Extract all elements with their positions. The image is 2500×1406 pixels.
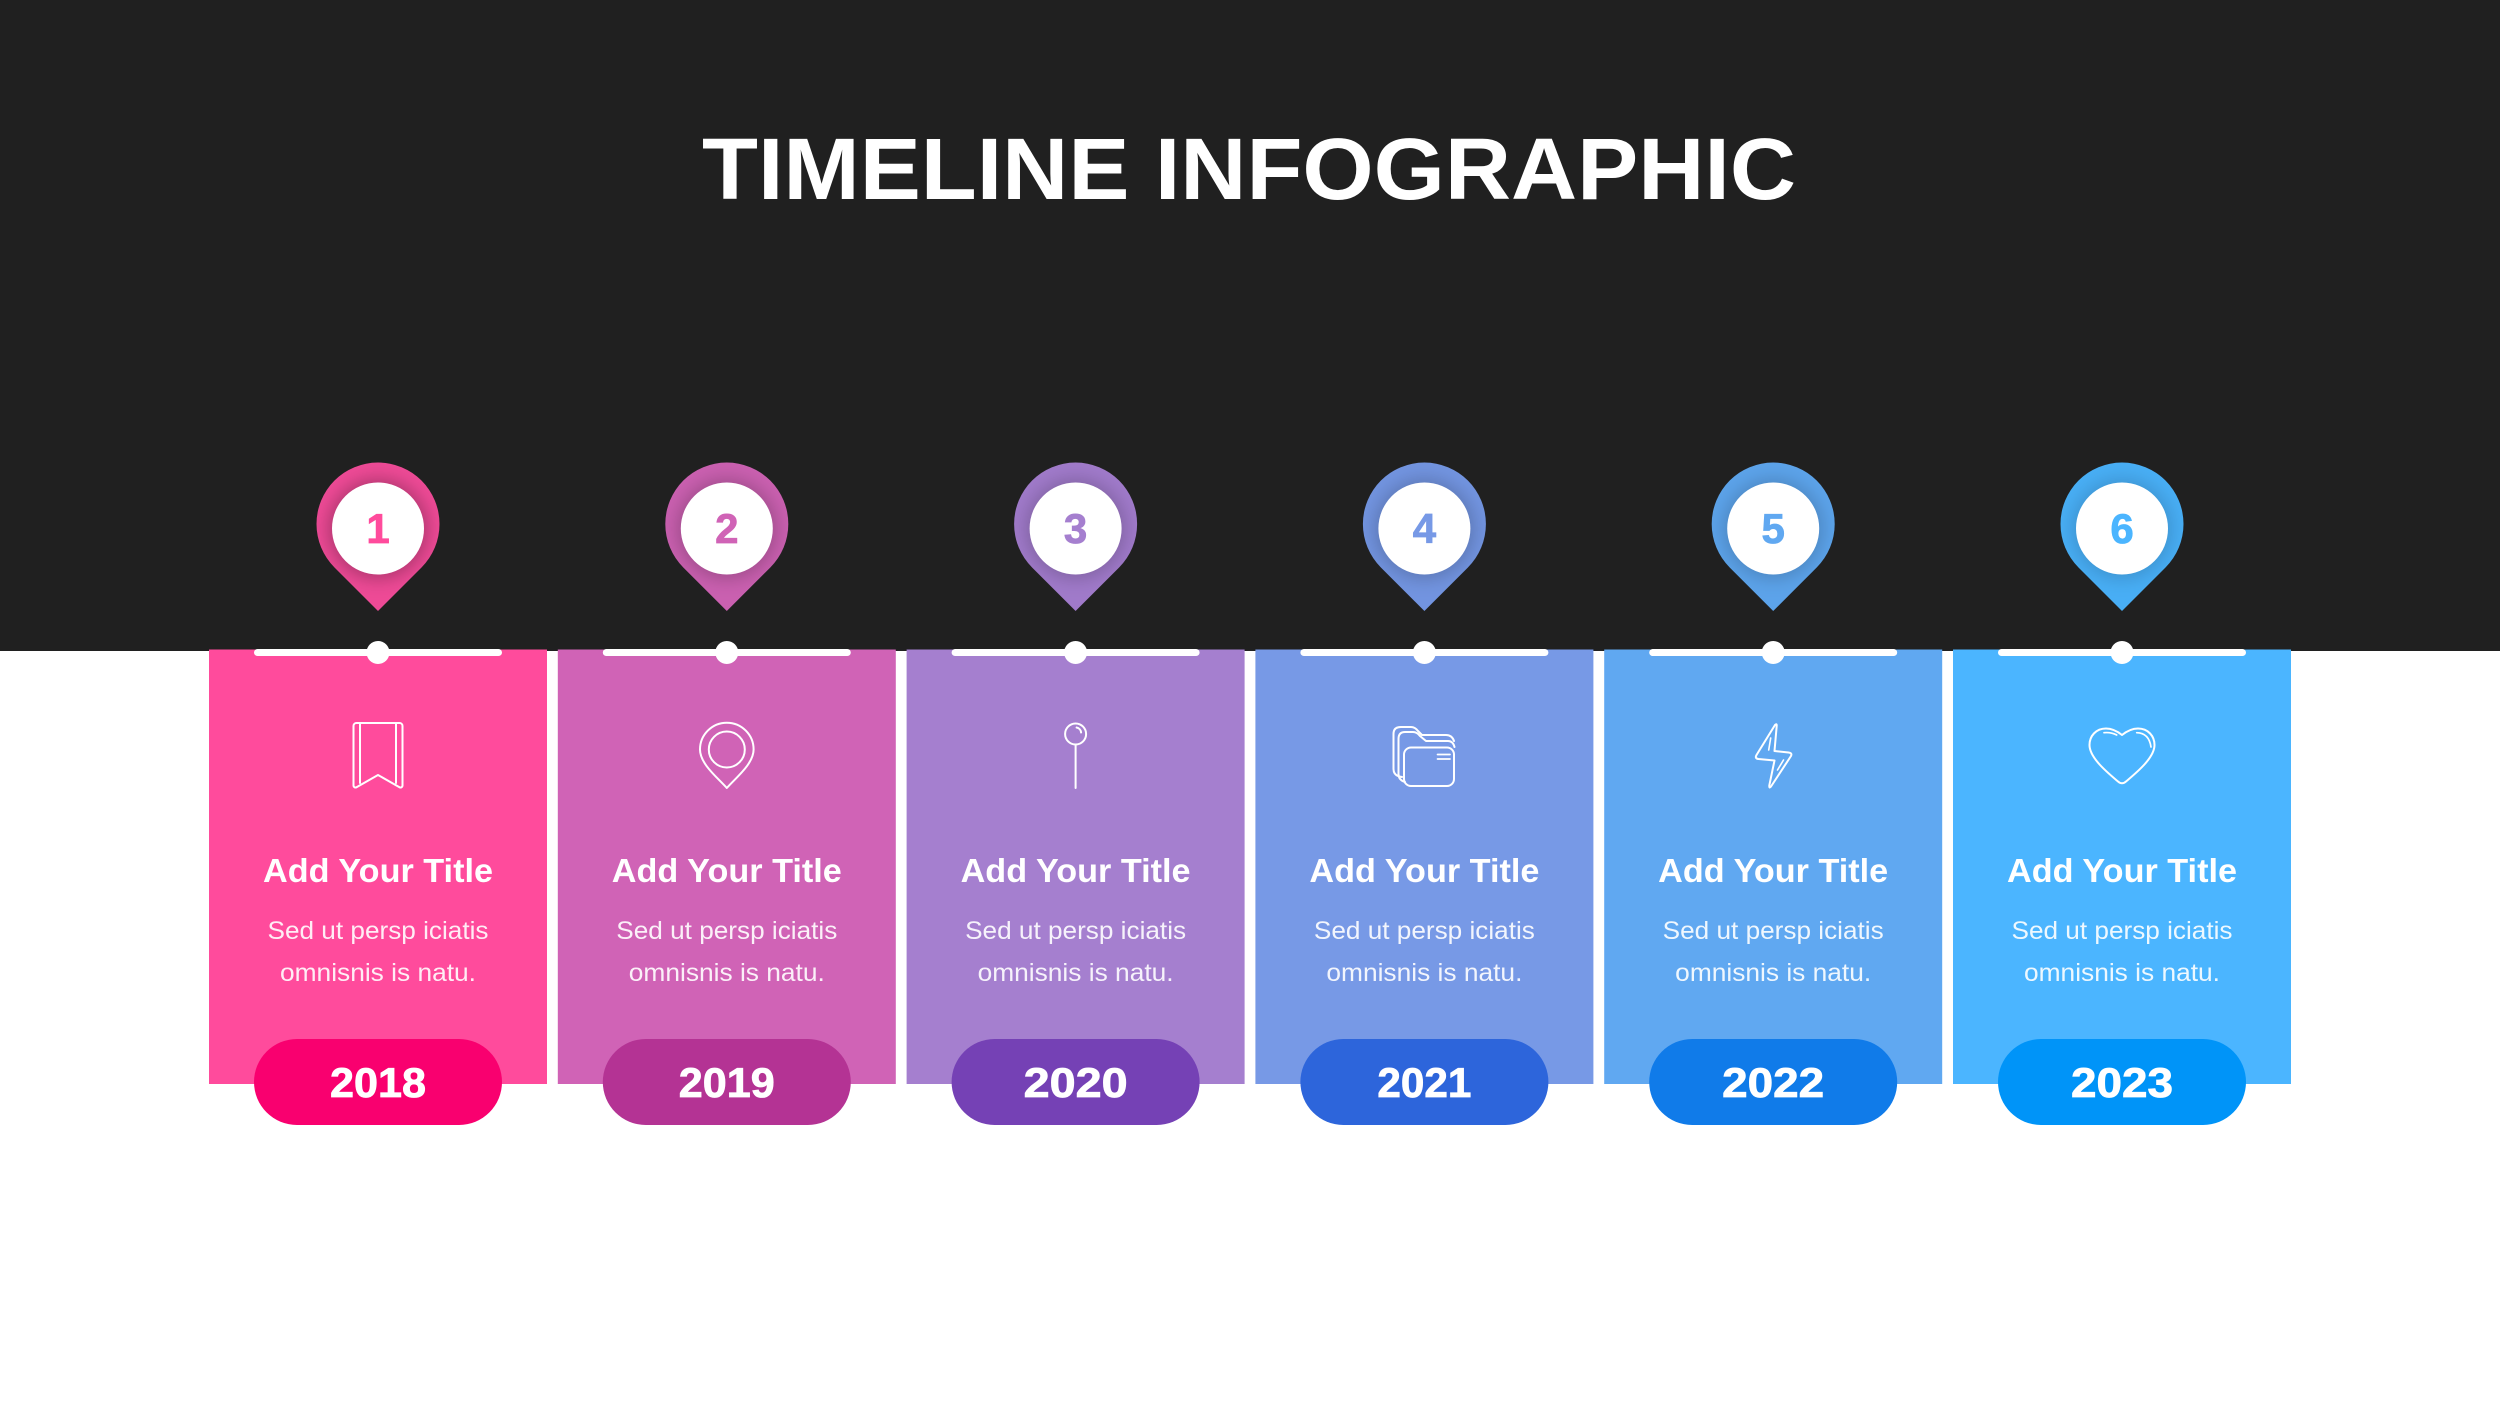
pin 6 xyxy=(2060,463,2184,611)
card 6 xyxy=(1953,650,2291,1084)
card text 6: Sed ut persp iciatis xyxy=(2012,917,2232,945)
column 3: 2020 xyxy=(907,463,1245,1125)
year pill 1 xyxy=(254,1039,502,1125)
card text 6 xyxy=(2012,917,2232,987)
icon: location pin xyxy=(700,723,754,788)
card 4 xyxy=(1255,650,1593,1084)
year pill 3 xyxy=(952,1039,1200,1125)
card 5 xyxy=(1604,650,1942,1084)
card text 1: omnisnis is natu. xyxy=(280,959,476,987)
slider 6 xyxy=(1998,641,2246,664)
title: TIMELINE INFOGRAPHIC xyxy=(702,121,1796,218)
pin 1 xyxy=(316,463,440,611)
card text 4 xyxy=(1314,917,1535,987)
card title 2: Add Your Title xyxy=(612,852,842,889)
icon: folders xyxy=(1394,727,1454,786)
card text 5 xyxy=(1663,917,1884,987)
card text 1: Sed ut persp iciatis xyxy=(268,917,488,945)
dark header background xyxy=(0,0,2500,651)
card text 3: Sed ut persp iciatis xyxy=(965,917,1186,945)
pin 2: 2 xyxy=(715,505,738,552)
card text 2 xyxy=(616,917,837,987)
card text 3: omnisnis is natu. xyxy=(978,959,1174,987)
card 1 xyxy=(209,650,547,1084)
year pill 5: 2022 xyxy=(1722,1059,1824,1106)
icon: lightning bolt xyxy=(1756,724,1791,788)
card text 5: Sed ut persp iciatis xyxy=(1663,917,1884,945)
card text 4: Sed ut persp iciatis xyxy=(1314,917,1535,945)
pin 5: 5 xyxy=(1762,505,1785,552)
pin 4 xyxy=(1363,463,1486,611)
year pill 6 xyxy=(1998,1039,2246,1125)
card text 5: omnisnis is natu. xyxy=(1675,959,1871,987)
icon: lollipop pin xyxy=(1065,724,1086,788)
column 2: 2019 xyxy=(558,463,896,1125)
icon: heart xyxy=(2090,728,2154,783)
year pill 4 xyxy=(1300,1039,1548,1125)
pin 3: 3 xyxy=(1064,505,1087,552)
slider 1 xyxy=(254,641,502,664)
card title 1: Add Your Title xyxy=(263,852,493,889)
slider 3 xyxy=(952,641,1200,664)
card text 4: omnisnis is natu. xyxy=(1326,959,1522,987)
card title 4: Add Your Title xyxy=(1309,852,1539,889)
year pill 2 xyxy=(603,1039,851,1125)
pin 3 xyxy=(1014,463,1137,611)
pin 2 xyxy=(665,463,788,611)
year pill 5 xyxy=(1649,1039,1897,1125)
card text 1 xyxy=(268,917,488,987)
card text 2: Sed ut persp iciatis xyxy=(616,917,837,945)
slider 2 xyxy=(603,641,851,664)
card title 6: Add Your Title xyxy=(2007,852,2237,889)
year pill 1: 2018 xyxy=(330,1059,426,1106)
card title 3: Add Your Title xyxy=(961,852,1191,889)
year pill 4: 2021 xyxy=(1377,1059,1471,1106)
pin 5 xyxy=(1712,463,1835,611)
card 3 xyxy=(907,650,1245,1084)
slider 5 xyxy=(1649,641,1897,664)
card 2 xyxy=(558,650,896,1084)
slider 4 xyxy=(1300,641,1548,664)
card title 5: Add Your Title xyxy=(1658,852,1888,889)
column 5: 2022 xyxy=(1604,463,1942,1125)
column 4: 2021 xyxy=(1255,463,1593,1125)
pin 4: 4 xyxy=(1413,505,1437,552)
year pill 6: 2023 xyxy=(2071,1059,2173,1106)
year pill 2: 2019 xyxy=(679,1059,775,1106)
card text 6: omnisnis is natu. xyxy=(2024,959,2220,987)
year pill 3: 2020 xyxy=(1024,1059,1128,1106)
column 6: 2023 xyxy=(1953,463,2291,1125)
card text 3 xyxy=(965,917,1186,987)
column 1: 2018 xyxy=(209,463,547,1125)
card text 2: omnisnis is natu. xyxy=(629,959,825,987)
pin 6: 6 xyxy=(2110,505,2134,552)
pin 1: 1 xyxy=(366,505,390,552)
icon: bookmark xyxy=(354,723,402,787)
